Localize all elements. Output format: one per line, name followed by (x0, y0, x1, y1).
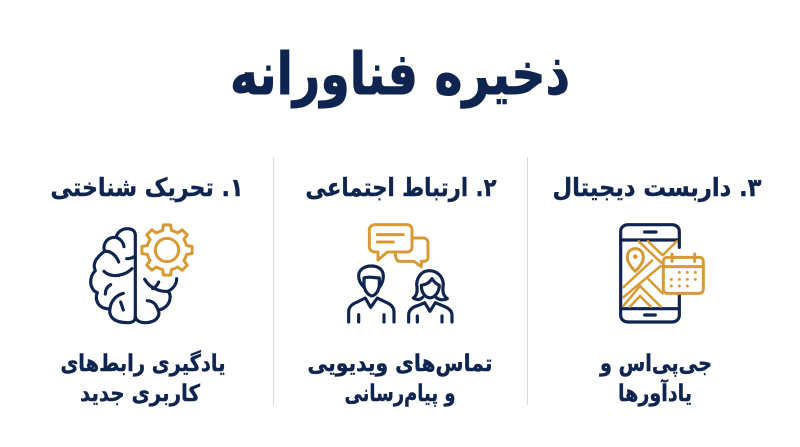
title: ذخیره فناورانه (230, 40, 570, 109)
icon: map and pin (623, 241, 677, 307)
icon: brain (91, 229, 177, 323)
panel: social connection: و پیام‌رسانی (344, 381, 456, 407)
icon: smartphone (621, 225, 679, 322)
icon: man (349, 266, 394, 322)
caption: video calls and messaging: تماس‌های ویدیویی (308, 351, 492, 377)
panel: digital context (552, 173, 762, 407)
icon: speech bubbles (369, 225, 428, 267)
heading: digital context: ۳. داربست دیجیتال (552, 173, 762, 202)
panel: social connection (306, 173, 496, 407)
icon: woman (409, 271, 452, 322)
panel: cognitive stimulation (51, 173, 244, 407)
heading: social connection: ۲. ارتباط اجتماعی (306, 173, 496, 202)
icon: gear (142, 225, 192, 275)
caption: GPS and reminders: جی‌پی‌اس و (599, 351, 712, 377)
heading: cognitive stimulation: ۱. تحریک شناختی (51, 173, 244, 203)
panel: digital context: یادآورها (618, 378, 692, 407)
caption: learning new interfaces: یادگیری رابط‌های (60, 350, 226, 377)
icon: calendar (663, 254, 703, 293)
panel: cognitive stimulation: کاربری جدید (80, 381, 201, 407)
